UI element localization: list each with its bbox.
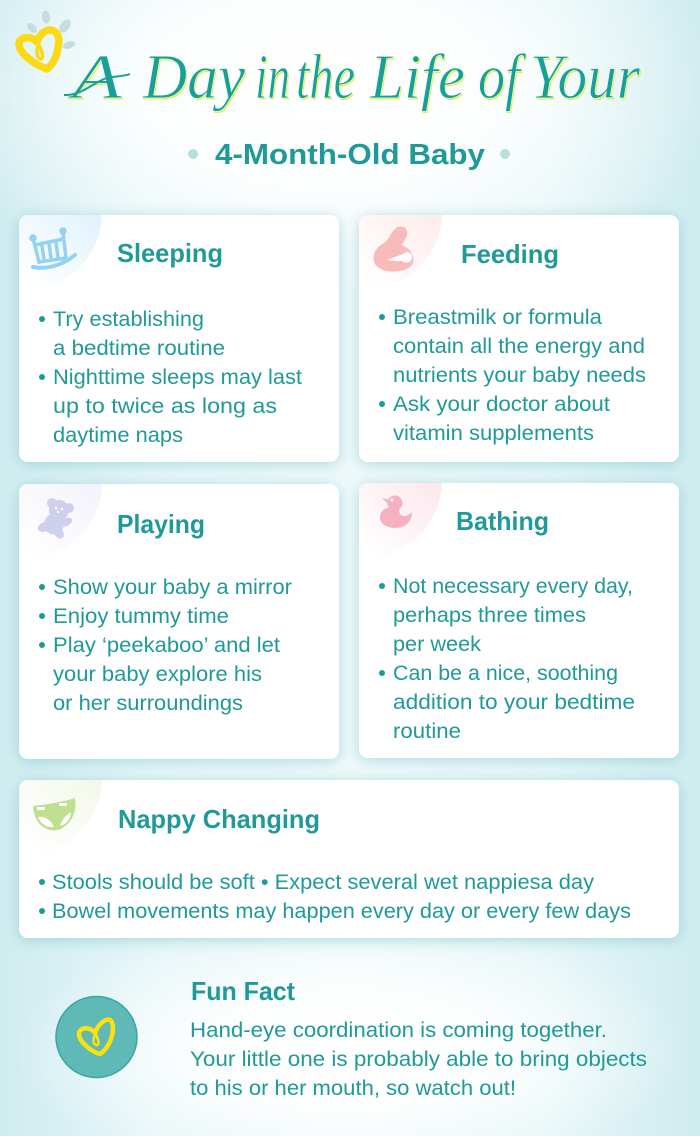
title: Life [370,42,466,114]
icon: cradle [31,229,75,268]
text block: Breastmilk or formula [393,306,602,329]
text block: contain all the energy and [393,335,645,358]
text block: up to twice as long as [53,395,277,418]
icon: yellow heart logo with rays [19,10,76,69]
text block: Nighttime sleeps may last [53,366,302,389]
title [64,41,642,114]
heading: Sleeping [117,238,223,268]
text block: your baby explore his [53,663,262,686]
title: in [255,41,290,112]
text block: Can be a nice, soothing [393,662,618,685]
text block [379,306,646,445]
title: Day [142,41,246,112]
text block: Play ‘peekaboo’ and let [53,634,280,657]
text block: a bedtime routine [53,337,225,360]
text block: Bowel movements may happen every day or every few days [52,900,631,923]
panel: feeding [359,215,679,462]
text block: Not necessary every day, [393,575,633,598]
subtitle: 4-Month-Old Baby [215,139,485,171]
title: the [297,42,356,114]
fun fact text: to his or her mouth, so watch out! [190,1077,516,1100]
text block: Stools should be soft • Expect several wet nappiesa day [52,871,595,894]
icon: mother nursing baby [374,226,414,272]
text block [39,871,631,923]
icon: nappy [33,798,75,830]
text block [39,308,302,447]
title: Life [369,41,465,112]
title: Day [143,42,247,114]
text block: vitamin supplements [393,422,594,445]
text block: Show your baby a mirror [53,576,292,599]
text block [379,575,635,743]
text block: perhaps three times [393,604,586,627]
text block: or her surroundings [53,692,243,715]
text block: addition to your bedtime [393,691,635,714]
icon: rubber duck [380,496,412,528]
title: of [479,42,528,114]
title: A [68,42,124,114]
title: of [478,41,527,112]
text block: daytime naps [53,424,183,447]
fun fact text: Your little one is probably able to bring objects [190,1048,647,1071]
fun fact text [190,1019,647,1100]
title: the [296,41,355,112]
title: in [256,42,291,114]
heading: Nappy Changing [118,804,320,834]
text block: nutrients your baby needs [393,364,646,387]
fun fact heading: Fun Fact [191,976,295,1006]
panel: bathing [359,483,679,758]
panel: playing [19,484,339,759]
text block: per week [393,633,482,656]
icon: fun fact heart badge [56,996,137,1078]
heading: Playing [117,509,205,539]
heading: Feeding [461,239,559,269]
heading: Bathing [456,506,549,536]
panel: nappy changing [19,780,679,938]
title: Your [531,42,642,114]
text block: Ask your doctor about [393,393,610,416]
panel: sleeping [19,215,339,462]
text block: Enjoy tummy time [53,605,229,628]
icon: teddy bear [36,498,74,540]
text block [39,576,292,715]
title: Your [530,41,641,112]
text block: routine [393,720,461,743]
title: A [67,41,123,112]
fun fact text: Hand-eye coordination is coming together. [190,1019,607,1042]
text block: Try establishing [53,308,204,331]
